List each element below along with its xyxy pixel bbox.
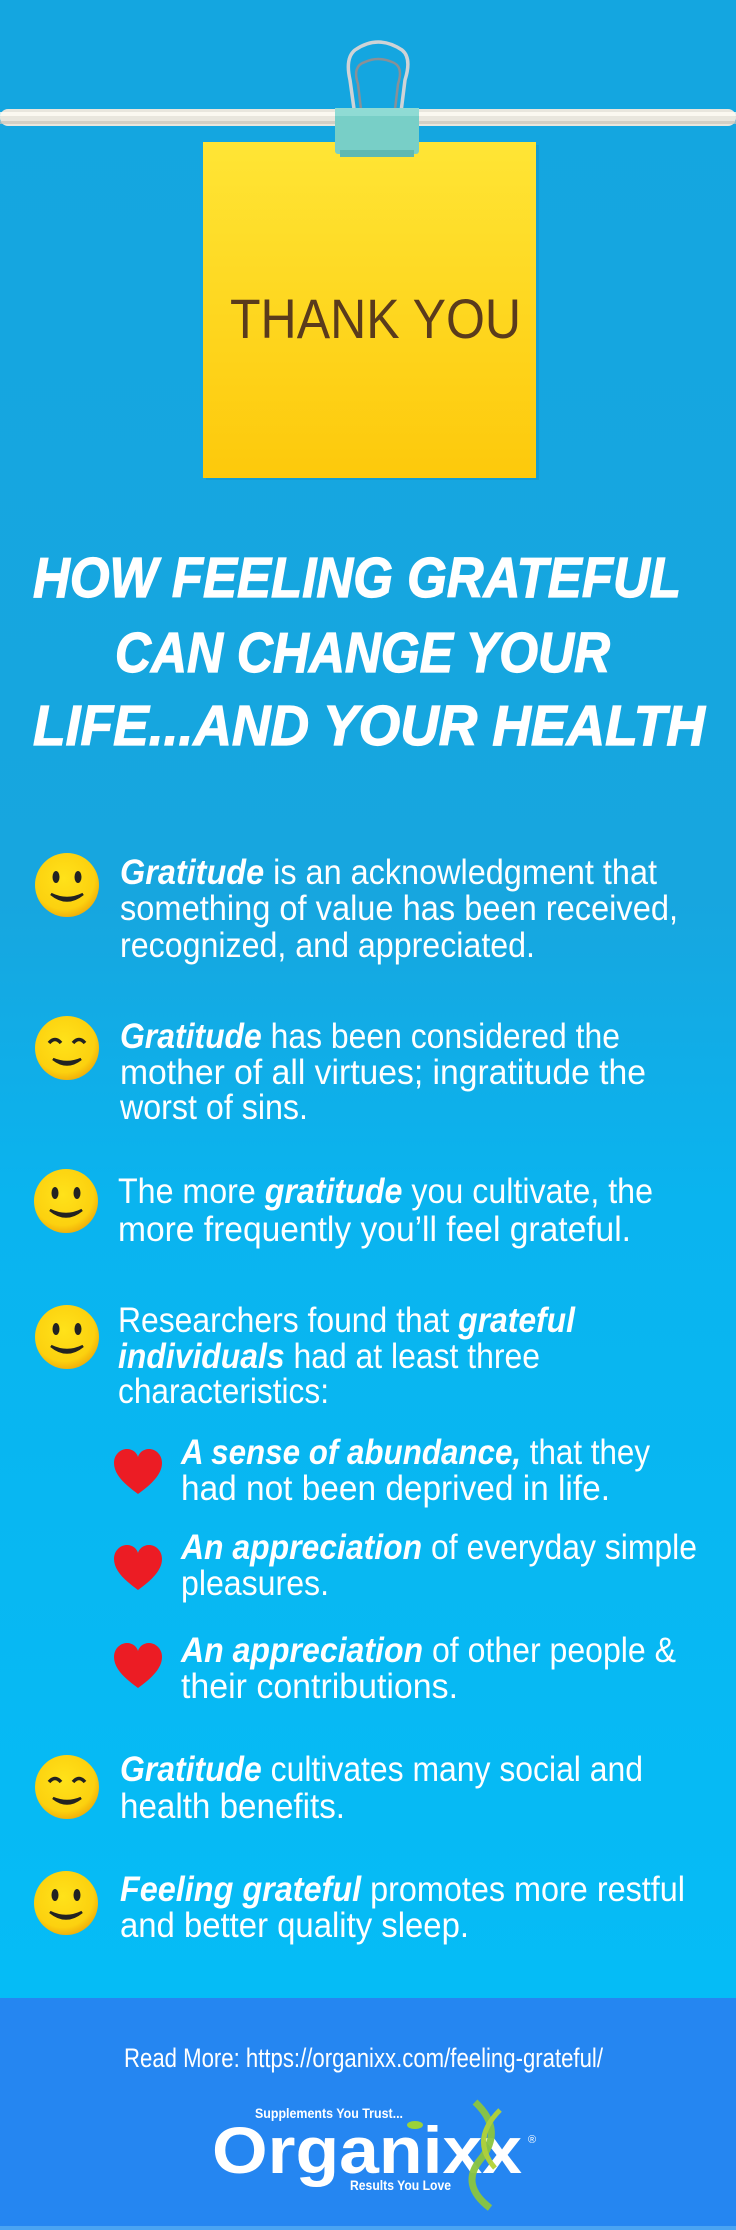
title: CAN CHANGE YOUR [115,621,610,685]
item 4: Researchers found that grateful [118,1301,576,1340]
item 4: characteristics: [118,1372,329,1411]
icon: binder clip [335,42,419,157]
sub item: abundance: had not been deprived in life. [181,1469,610,1508]
read more link text: Read More: https://organixx.com/feeling-grateful/ [124,2043,603,2073]
sub item: other people: their contributions. [181,1667,458,1706]
item 2: Gratitude has been considered the [120,1017,620,1056]
fact list [34,853,697,1945]
item 3: The more gratitude you cultivate, the [118,1172,653,1211]
sub item: other people [114,1631,676,1706]
footer [0,1998,736,2230]
logo: ® [528,2134,536,2146]
item 1: Gratitude is an acknowledgment that [120,853,657,892]
item 5 [35,1750,643,1826]
item 5: health benefits. [120,1787,345,1826]
logo: Organixx [212,2113,522,2187]
logo: Results You Love [350,2177,451,2193]
note text: THANK YOU: THANK YOU [230,287,521,350]
sub item: simple pleasures: An appreciation of everyday simple [180,1528,697,1567]
item 2: worst of sins. [119,1088,308,1127]
sub item: abundance [114,1433,650,1508]
item 6: Feeling grateful promotes more restful [120,1870,685,1909]
item 3: more frequently you’ll feel grateful. [118,1210,631,1249]
icon: dna leaf [472,2102,500,2208]
sub item: simple pleasures: pleasures. [181,1564,329,1603]
item 3 [34,1169,653,1249]
title: HOW FEELING GRATEFUL [33,546,681,610]
sub item: other people: An appreciation of other people & [180,1631,676,1670]
sub item: abundance: A sense of abundance, that they [180,1433,650,1472]
item 1: something of value has been received, [120,889,678,928]
sub item: simple pleasures [114,1528,697,1603]
item 4 [35,1301,576,1411]
item 1: recognized, and appreciated. [120,926,535,965]
item 2: mother of all virtues; ingratitude the [120,1053,646,1092]
logo: Supplements You Trust... [255,2105,403,2121]
item 4: individuals had at least three [118,1337,540,1376]
item 6: and better quality sleep. [120,1906,469,1945]
item 1 [35,853,678,965]
logo [212,2102,536,2208]
item 5: Gratitude cultivates many social and [120,1750,643,1789]
title [33,546,707,758]
title: LIFE...AND YOUR HEALTH [33,694,707,758]
item 6 [34,1870,685,1945]
sticky note [203,142,539,480]
rope [0,109,736,126]
item 2 [35,1016,646,1127]
